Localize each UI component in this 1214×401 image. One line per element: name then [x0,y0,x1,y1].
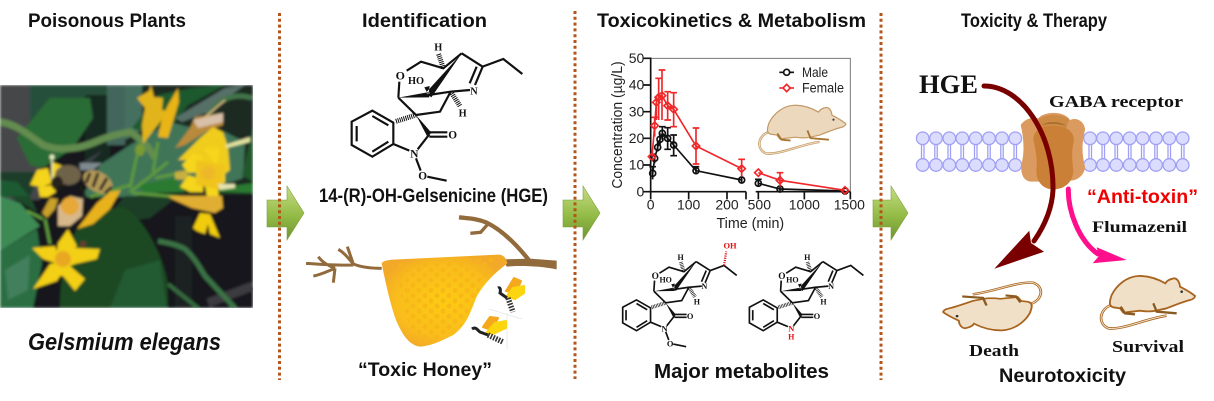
caption: major metabolites: Major metabolites [654,361,829,383]
molecule: metabolite 2: HO [786,276,799,285]
molecule: HGE: H [459,109,467,120]
vine [0,122,155,158]
molecule: metabolite 1: HO [659,276,672,285]
heading: Identification: Identification [362,11,487,32]
line chart: concentration vs time: Concentration (µg/L) [610,61,626,189]
heading: Toxicokinetics & Metabolism: Toxicokinetics & Metabolism [597,11,866,32]
icon: bees [472,278,524,349]
line chart: concentration vs time [610,50,865,232]
molecule: metabolite 2: H [804,253,811,262]
arrow: to identification [267,186,304,240]
molecule: HGE: O [448,129,457,141]
label: death: Death [969,341,1020,360]
arrow: to toxicity [873,186,908,240]
line chart: concentration vs time: 200 [715,196,739,212]
molecule: HGE: HO [408,76,424,87]
line chart: concentration vs time: 50 [629,50,645,66]
arrow: to toxicokinetics [563,186,600,240]
line chart: concentration vs time: 40 [629,77,645,93]
series: male [649,127,848,194]
heading: Poisonous Plants: Poisonous Plants [28,11,186,32]
photo: Gelsemium flowers with bee [0,85,253,308]
molecule: metabolite 1: H [694,297,701,306]
line chart: concentration vs time: 1500 [834,196,865,212]
panel: poisonous plants [0,11,253,356]
molecule: metabolite 2: O [778,272,786,282]
stems [27,142,185,244]
molecule: metabolite 1: N [702,282,708,291]
label: HGE: HGE [919,70,978,99]
divider lines [280,11,881,380]
icon: mouse [759,105,846,154]
left flower [30,162,65,197]
legend [779,64,844,96]
label: flumazenil: Flumazenil [1092,219,1188,236]
lower leaves [10,196,37,212]
caption: toxic honey: “Toxic Honey” [358,360,492,381]
line chart: concentration vs time: 30 [629,103,645,119]
line chart: concentration vs time: 1000 [789,196,820,212]
icon: surviving mouse [1101,276,1195,328]
molecule: HGE: N [470,86,478,97]
arrow: flumazenil to survival [1068,189,1127,263]
molecule: HGE: H [434,43,442,54]
panel: identification [306,11,557,381]
line chart: concentration vs time: 500 [748,196,771,212]
molecule: metabolite 2 [749,253,863,342]
molecule: metabolite 1: O [667,338,674,348]
line chart: concentration vs time: 10 [629,157,645,173]
species name: Gelsmium elegans [28,329,221,356]
bottom flower [32,229,100,291]
molecule: metabolite 1 [623,240,737,348]
molecule: metabolite 1: O [652,272,659,282]
line chart: concentration vs time: 0 [637,183,645,199]
label: GABA receptor: GABA receptor [1049,92,1184,111]
molecule: metabolite 2: H [820,297,827,306]
membrane: lipid bilayer [916,132,1189,171]
flowers [136,85,166,145]
molecule: metabolite 2: N [788,324,794,334]
molecule name: 14-(R)-OH-Gelsenicine (HGE) [319,186,548,207]
panel: toxicokinetics and metabolism [597,11,866,383]
icon: GABA receptor channel [1021,113,1085,189]
line chart: concentration vs time: 0 [647,196,655,212]
caption: neurotoxicity: Neurotoxicity [999,366,1126,387]
label: survival: Survival [1112,337,1184,356]
heading: Toxicity & Therapy: Toxicity & Therapy [961,11,1107,32]
molecule: HGE [352,43,522,183]
molecule: metabolite 1: O [687,311,694,321]
molecule: metabolite 1: N [662,324,668,334]
icon: dead mouse [943,283,1041,330]
panel: toxicity and therapy [916,11,1198,387]
series: female [648,70,849,194]
arrow: HGE to death [984,86,1053,269]
molecule: HGE: O [418,171,427,183]
molecule: metabolite 2: O [814,311,821,321]
molecule: metabolite 1: H [677,253,684,262]
legend: Male [802,64,828,80]
bee [76,151,101,166]
illustration: honeycomb on branch [306,217,557,347]
line chart: concentration vs time: 20 [629,130,645,146]
label: anti-toxin: “Anti-toxin” [1087,187,1198,208]
molecule: HGE: N [410,148,419,160]
line chart: concentration vs time: Time (min) [716,216,784,232]
legend: Female [802,80,844,96]
molecule: metabolite 2: H [788,333,795,342]
molecule: HGE: O [396,68,405,82]
molecule: metabolite 2: N [828,282,834,291]
molecule: metabolite 1: OH [723,240,737,250]
line chart: concentration vs time: 100 [677,196,701,212]
